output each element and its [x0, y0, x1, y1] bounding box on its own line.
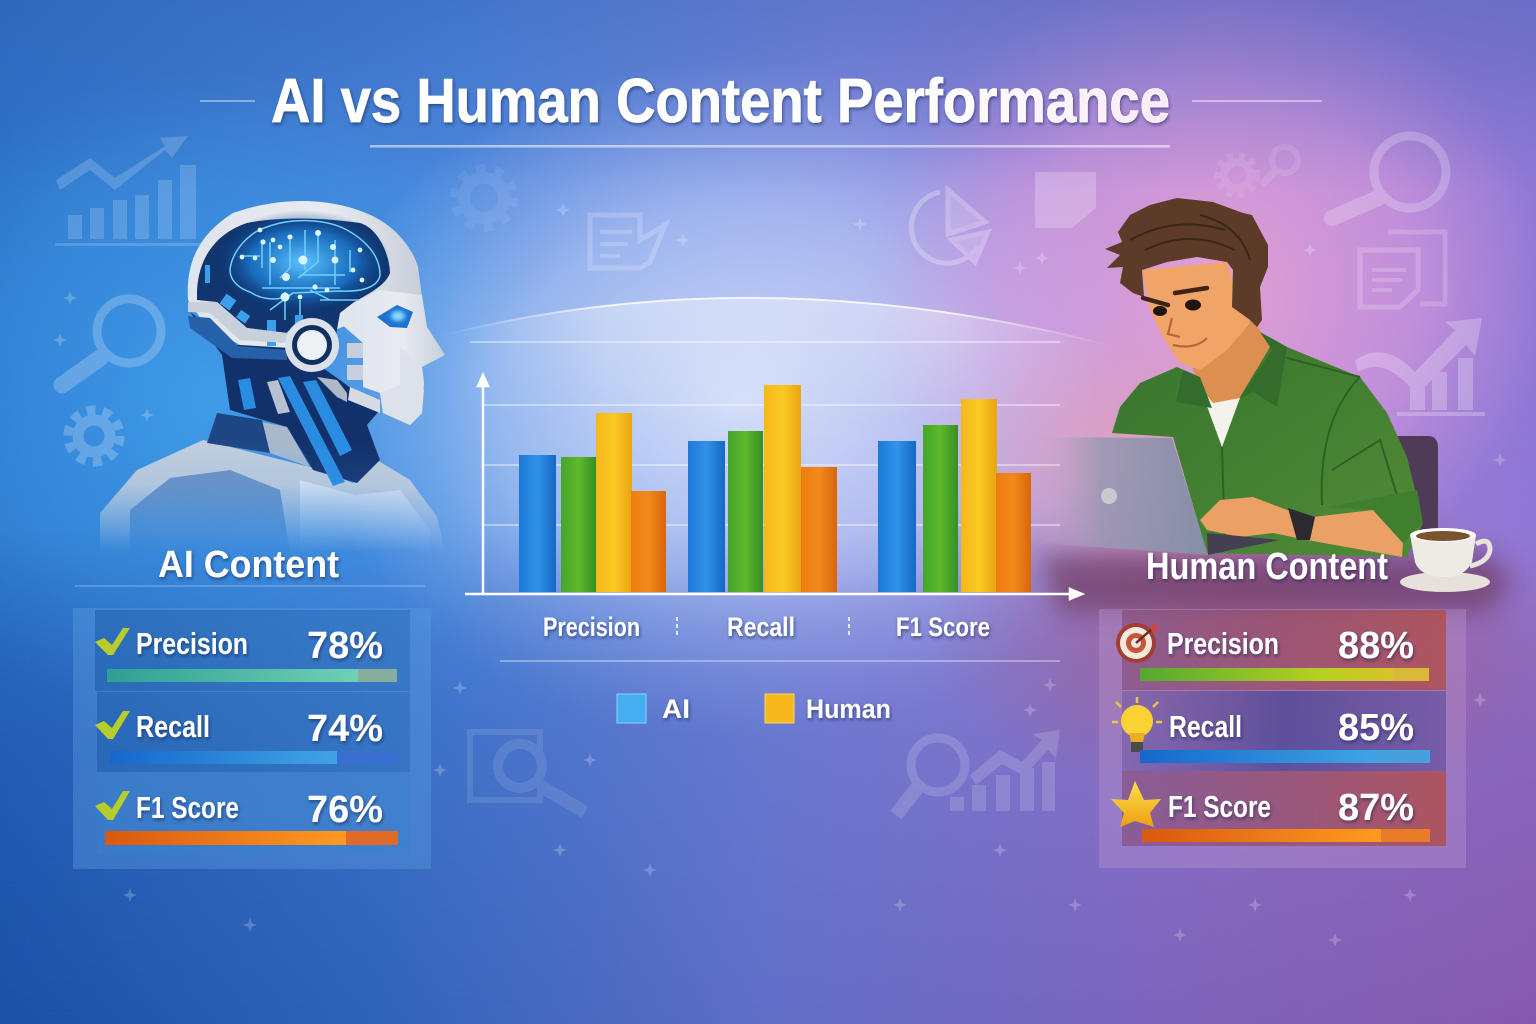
robot skull — [188, 201, 422, 348]
icon: lightbulb — [1112, 697, 1162, 752]
icon: star — [1111, 781, 1161, 827]
legend — [617, 694, 891, 724]
legend: AI — [617, 694, 690, 724]
metric: Human Recall: Recall — [1169, 709, 1242, 744]
robot ear disc — [285, 318, 339, 372]
metric: AI Precision — [95, 625, 397, 682]
robot face plate — [340, 290, 445, 425]
axis label: F1 Score: F1 Score — [896, 612, 990, 642]
metric: Human F1 Score: F1 Score — [1168, 789, 1271, 824]
icon: faint growth chart right — [1355, 318, 1485, 416]
metric: AI Precision: Precision — [136, 626, 248, 661]
legend: Human: Human — [806, 694, 891, 724]
legend: Human — [765, 694, 891, 724]
face — [1142, 262, 1250, 370]
group: Recall bars — [688, 385, 837, 592]
metric: AI Precision: 78% — [307, 625, 383, 667]
neck — [1190, 318, 1270, 447]
metric: AI F1 Score: 76% — [307, 789, 383, 831]
chart gridlines — [470, 342, 1060, 525]
icon: faint gear and magnifier right — [1217, 147, 1298, 195]
legend: AI: AI — [662, 694, 690, 724]
metric: Human Precision: Precision — [1167, 626, 1279, 661]
eyebrows and eyes — [1143, 288, 1207, 316]
metric: AI F1 Score: F1 Score — [136, 790, 239, 825]
icon: faint pie chart — [911, 190, 988, 263]
robot brain cavity — [197, 218, 390, 334]
metric: AI F1 Score — [95, 789, 398, 845]
metric: Human Precision: 88% — [1338, 625, 1414, 667]
coffee cup — [1400, 528, 1490, 592]
icon: target — [1116, 623, 1158, 663]
metric: Human Precision — [1116, 623, 1429, 681]
hair — [1105, 198, 1268, 327]
metric: AI Recall: Recall — [136, 709, 210, 744]
metric: Human F1 Score — [1111, 781, 1430, 842]
chair — [1395, 436, 1438, 540]
robot eye — [377, 305, 413, 328]
robot circuit brain — [230, 221, 380, 335]
y axis arrow — [478, 375, 488, 593]
icon: faint chart top left — [55, 136, 200, 246]
panel: Human metrics — [1099, 609, 1466, 868]
robot neck — [190, 312, 380, 483]
x axis arrow — [465, 589, 1082, 599]
group: F1 Score bars — [878, 399, 1031, 592]
metric: Human F1 Score: 87% — [1338, 787, 1414, 829]
axis label: Precision: Precision — [543, 612, 640, 642]
undershirt — [1200, 387, 1240, 447]
rolled sleeve — [1327, 490, 1423, 543]
shirt seams — [1222, 358, 1400, 545]
metric: Human Recall: 85% — [1338, 707, 1414, 749]
metric: AI Recall: 74% — [307, 708, 383, 750]
robot collar — [207, 413, 310, 467]
forearm and hand — [1200, 497, 1403, 557]
icon: faint magnifier and chart — [896, 730, 1060, 815]
heading: Human Content: Human Content — [1146, 546, 1388, 588]
human torso in green shirt — [1112, 332, 1423, 557]
group: Precision bars — [519, 413, 666, 592]
title text: AI vs Human Content Performance — [271, 67, 1170, 136]
human illustration — [1040, 198, 1510, 612]
icon: faint document — [590, 215, 665, 268]
nose and smile — [1168, 318, 1207, 346]
faint background icons — [53, 136, 1507, 947]
decorative sparkles — [53, 203, 1507, 947]
metric: Human Recall — [1112, 697, 1430, 763]
laptop screen — [1040, 437, 1208, 555]
AI robot illustration — [100, 201, 445, 552]
robot shoulders — [100, 440, 445, 552]
icon: faint camera magnifier — [470, 732, 585, 812]
bar chart — [465, 342, 1082, 662]
icon: faint gear left — [68, 410, 120, 462]
icon: faint magnifier top right — [1332, 136, 1446, 218]
desk — [1040, 556, 1510, 612]
chart arc backdrop — [453, 296, 1094, 430]
collar — [1176, 332, 1287, 408]
icon: faint documents — [1360, 232, 1445, 307]
ear — [1236, 273, 1258, 313]
laptop logo — [1101, 488, 1117, 504]
icon: faint doc right — [1035, 172, 1096, 228]
metric: AI Recall — [95, 708, 398, 764]
robot side armor — [188, 302, 287, 343]
axis label: Recall: Recall — [727, 612, 795, 642]
icon: faint magnifier left — [62, 299, 161, 385]
panel: AI metrics — [73, 608, 431, 869]
icon: faint gear top — [454, 168, 514, 228]
watch — [1288, 508, 1315, 540]
heading: AI Content: AI Content — [158, 544, 339, 586]
laptop base — [1207, 533, 1280, 555]
